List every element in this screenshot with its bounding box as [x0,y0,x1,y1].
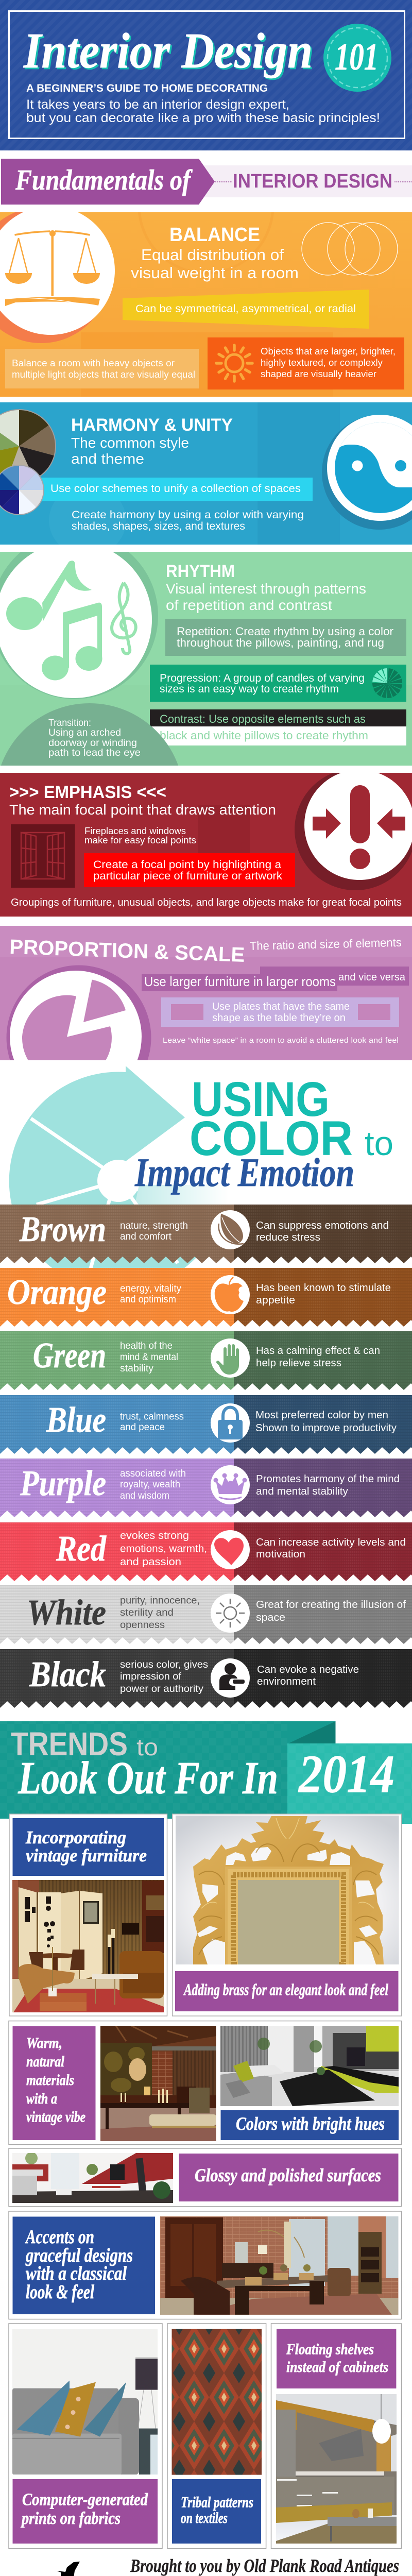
card: vintage furniture [9,1814,167,2016]
badge: 101: 101 [335,36,379,78]
photo: dining room with brick [160,2216,399,2315]
definition text: The common style [71,435,189,451]
definition text: Visual interest through patterns [166,581,366,597]
label: vintage furniture [12,1818,164,1876]
text: create harmony [72,509,304,532]
band: green: Has a calming effect & can [256,1345,380,1357]
card: computer generated prints [9,2324,162,2549]
text box: balance a room [5,349,199,388]
label: vintage furniture: Incorporating [25,1827,126,1848]
icon: small colour wheel [0,465,44,515]
text: create harmony: Create harmony by using a color with varying [72,509,304,521]
text: fireplaces and windows: make for easy focal points [84,835,196,845]
heading: trends banner: to [136,1734,158,1760]
icon: exclamation with arrows [295,769,412,890]
band: orange: energy, vitality [120,1283,181,1294]
band: orange [0,1268,412,1327]
band: purple: associated with [120,1468,186,1479]
label: graceful designs: with a classical [26,2263,127,2284]
panel: harmony and unity [0,402,412,556]
photo: glossy red room [12,2153,173,2203]
text box: repetition [165,619,406,656]
band: orange: appetite [256,1295,295,1306]
heading: trends banner [0,1721,412,1824]
text: fireplaces and windows: Fireplaces and windows [84,826,186,836]
band: black: environment [257,1676,316,1687]
text box: visually heavier: shaped are visually heavier [261,369,376,379]
definition text: of repetition and contrast [166,597,332,613]
icon: padlock [211,1403,250,1443]
band: black: power or authority [120,1684,204,1694]
callout: larger furniture: and vice versa [338,972,406,983]
band: blue [0,1395,412,1454]
text box: progression: sizes is an easy way to create rhythm [160,683,339,695]
band: brown: reduce stress [256,1232,320,1243]
label: bright hues: Colors with bright hues [236,2113,385,2134]
callout: plates [161,997,399,1027]
callout: larger furniture [142,967,409,991]
label: vintage furniture: vintage furniture [26,1845,147,1866]
label: floating shelves [277,2329,396,2388]
heading: using color to impact emotion [134,1072,393,1195]
definition text: Equal distribution of [141,246,284,264]
title: Interior Design [25,25,314,80]
icon: shadow circle [0,212,94,343]
label: warm natural materials: natural [26,2053,65,2070]
label: computer generated prints: prints on fabrics [21,2509,121,2528]
photo: bright hues living room [220,2026,399,2106]
heading: harmony: HARMONY & UNITY [71,415,233,435]
band: brown: Brown [19,1210,106,1249]
photo: kitchen [276,2394,397,2544]
heading: fundamentals of interior design: Fundamentals of [15,164,193,196]
arch: transition: Using an arched [48,727,121,738]
text box: balance a room: Balance a room with heavy objects or [12,358,175,368]
text band: contrast [150,709,406,745]
label: bright hues [220,2110,399,2140]
band: brown: and comfort [120,1231,172,1242]
text: groupings: Groupings of furniture, unusual objects, and large objects make for great focal points [11,897,402,908]
band: red: emotions, warmth, [120,1544,207,1555]
label: computer generated prints: Computer-generated [22,2490,148,2509]
band: red: motivation [256,1549,305,1560]
panel: header [0,0,412,150]
callout: symmetrical: Can be symmetrical, asymmetrical, or radial [135,303,356,315]
heading: trends banner: 2014 [298,1743,394,1804]
band: black: Can evoke a negative [257,1664,359,1675]
heading: fundamentals of interior design: INTERIOR DESIGN [233,171,392,192]
icon: large colour wheel [0,409,56,483]
band: blue: trust, calmness [120,1412,184,1422]
intro text: but you can decorate like a pro with these basic principles! [26,111,380,125]
text box: progression [150,665,406,702]
photo: warm dining hall [100,2026,216,2141]
title: Interior Design [23,23,313,79]
icon: bird [57,2562,88,2576]
card: tribal patterns [167,2324,266,2549]
band: purple [0,1459,412,1517]
band: green [0,1331,412,1390]
arch: transition: Transition: [48,718,91,728]
label: graceful designs: look & feel [26,2281,94,2303]
band: brown: nature, strength [120,1221,188,1231]
band: purple: Promotes harmony of the mind [256,1473,400,1485]
band: green: mind & mental [120,1352,178,1363]
band: brown [0,1205,412,1263]
band: white [0,1585,412,1644]
label: warm natural materials: materials [26,2072,74,2089]
text band: contrast: black and white pillows to create rhythm [160,729,368,742]
panel: rhythm [0,552,412,766]
band: blue: and peace [120,1422,165,1433]
icon: pie chart [6,965,151,1060]
heading: using color to impact emotion: to [365,1124,393,1162]
photo: gilded mirror [176,1816,399,1964]
arch: transition: path to lead the eye [48,748,141,758]
label: adding brass [175,1971,399,2011]
label: floating shelves: Floating shelves [286,2341,374,2358]
label: warm natural materials [12,2026,96,2140]
band: red: and passion [120,1556,181,1568]
text box: repetition: throughout the pillows, painting, and rug [177,636,384,649]
band: green: Green [33,1336,106,1376]
label: graceful designs [12,2216,155,2314]
icon: sun [211,1594,250,1633]
icon: yin yang [322,412,412,530]
definition text: and theme [71,451,144,467]
icon: window [11,824,75,888]
card: brass mirror [173,1814,402,2016]
label: tribal patterns: on textiles [181,2510,228,2527]
photo: vintage living room [12,1880,164,2012]
text: fireplaces and windows [84,826,196,845]
label: computer generated prints [12,2479,158,2544]
intro text [26,97,380,125]
card: floating shelves [271,2324,402,2549]
label: graceful designs: graceful designs [25,2245,133,2266]
panel: balance [0,212,412,397]
definition text [166,581,366,613]
heading: using color to impact emotion: COLOR [190,1111,353,1166]
band: white: space [256,1612,285,1623]
subtitle: A BEGINNER’S GUIDE TO HOME DECORATING [26,82,268,94]
band: red: Can increase activity levels and [256,1537,406,1548]
band: purple: Purple [20,1464,106,1503]
definition text: The ratio and size of elements [249,936,402,953]
band: purple: and mental stability [256,1486,348,1497]
heading: emphasis: >>> EMPHASIS <<< [9,783,166,802]
photo: sofa with pillows [12,2329,158,2475]
heading: trends banner: TRENDS [11,1725,128,1762]
band: white: purity, innocence, [120,1596,200,1606]
arch: transition [1,703,178,766]
badge: 101 [323,24,391,92]
text box: visually heavier: Objects that are larger, brighter, [261,346,396,357]
callout: larger furniture: Use larger furniture in larger rooms [144,974,336,989]
text box: visually heavier: highly textured, or complexly [261,358,383,368]
band: white: openness [120,1620,165,1631]
icon: hand [211,1338,250,1378]
band: black: impression of [120,1671,182,1682]
band: blue: Shown to improve productivity [255,1422,397,1434]
logo: old plank road antiques [22,2562,112,2576]
graphic: colour fan [9,1066,228,1291]
icon: crown [211,1465,250,1504]
panel: proportion and scale [0,926,412,1060]
icon: leaf [211,1210,250,1249]
band: green: health of the [120,1341,173,1351]
card: glossy surfaces [9,2148,402,2207]
icon: scales [0,206,115,335]
band: blue: Blue [46,1400,106,1440]
label: warm natural materials: with a [26,2090,57,2107]
callout band: colour schemes [41,478,313,501]
label: glossy [179,2154,399,2201]
definition text [71,437,188,464]
band: green: stability [120,1363,154,1374]
text box: balance a room: multiple light objects that are visually equal [12,369,195,380]
heading: using color to impact emotion: Impact Emotion [134,1150,354,1195]
band: black: serious color, gives [120,1659,208,1670]
band: red [0,1522,412,1581]
band: white: White [27,1593,106,1633]
callout: focal point: Create a focal point by highlighting a [93,859,281,871]
icon: music notes [0,552,158,699]
icon: overlapping circles [302,223,398,275]
panel: emphasis [0,769,412,917]
text band: contrast: Contrast: Use opposite elements such as [160,713,366,725]
heading: trends banner: Look Out For In [18,1753,278,1804]
text: create harmony: shades, shapes, sizes, and textures [72,520,245,532]
band: brown: Can suppress emotions and [256,1220,389,1231]
text box: repetition: Repetition: Create rhythm by using a color [177,625,393,638]
heading: proportion and scale: PROPORTION & SCALE [9,936,245,967]
callout band: colour schemes: Use color schemes to unify a collection of spaces [50,483,301,495]
band: orange: Has been known to stimulate [256,1282,391,1294]
callout: focal point: particular piece of furniture or artwork [93,870,283,882]
callout: focal point [84,853,295,887]
band: white: sterility and [120,1607,174,1618]
band: black [0,1649,412,1708]
label: tribal patterns [172,2479,261,2544]
callout: plates: shape as the table they’re on [212,1012,346,1024]
text box: visually heavier [208,337,404,389]
band: orange: Orange [7,1273,107,1312]
heading: fundamentals of interior design [1,159,412,205]
label: warm natural materials: Warm, [26,2035,62,2052]
card: graceful designs [9,2211,402,2319]
heading: rhythm: RHYTHM [166,562,235,581]
band: purple: royalty, wealth [120,1479,180,1490]
header frame [9,11,405,138]
band: red: evokes strong [120,1530,189,1541]
definition text [131,246,299,282]
band: green: help relieve stress [256,1358,341,1369]
label: tribal patterns: Tribal patterns [181,2494,253,2511]
band: black: Black [29,1655,106,1694]
heading: using color to impact emotion: USING [192,1072,330,1127]
callout: symmetrical [123,290,369,329]
label: warm natural materials: vintage vibe [26,2109,85,2126]
label: glossy: Glossy and polished surfaces [195,2165,381,2185]
band: orange: and optimism [120,1294,176,1305]
label: floating shelves: instead of cabinets [286,2359,388,2376]
arch: transition: doorway or winding [48,738,137,749]
icon: apple [211,1275,250,1314]
band: white: Great for creating the illusion of [256,1599,406,1611]
heading: balance: BALANCE [169,224,260,246]
label: graceful designs: Accents on [25,2226,94,2248]
callout: plates: Use plates that have the same [212,1001,350,1012]
icon: heart [211,1530,250,1569]
definition text: visual weight in a room [131,264,299,282]
photo: tribal rug [172,2329,262,2475]
card: warm materials and bright hues [9,2021,402,2145]
definition text: The main focal point that draws attention [9,802,276,818]
text box: progression: Progression: A group of candles of varying [160,672,365,684]
text: white space: Leave “white space” in a room to avoid a cluttered look and feel [163,1036,399,1045]
band: purple: and wisdom [120,1490,169,1501]
band: blue: Most preferred color by men [255,1410,388,1421]
band: red: Red [56,1529,107,1569]
intro text: It takes years to be an interior design expert, [26,97,289,112]
icon: person at desk [211,1658,250,1698]
